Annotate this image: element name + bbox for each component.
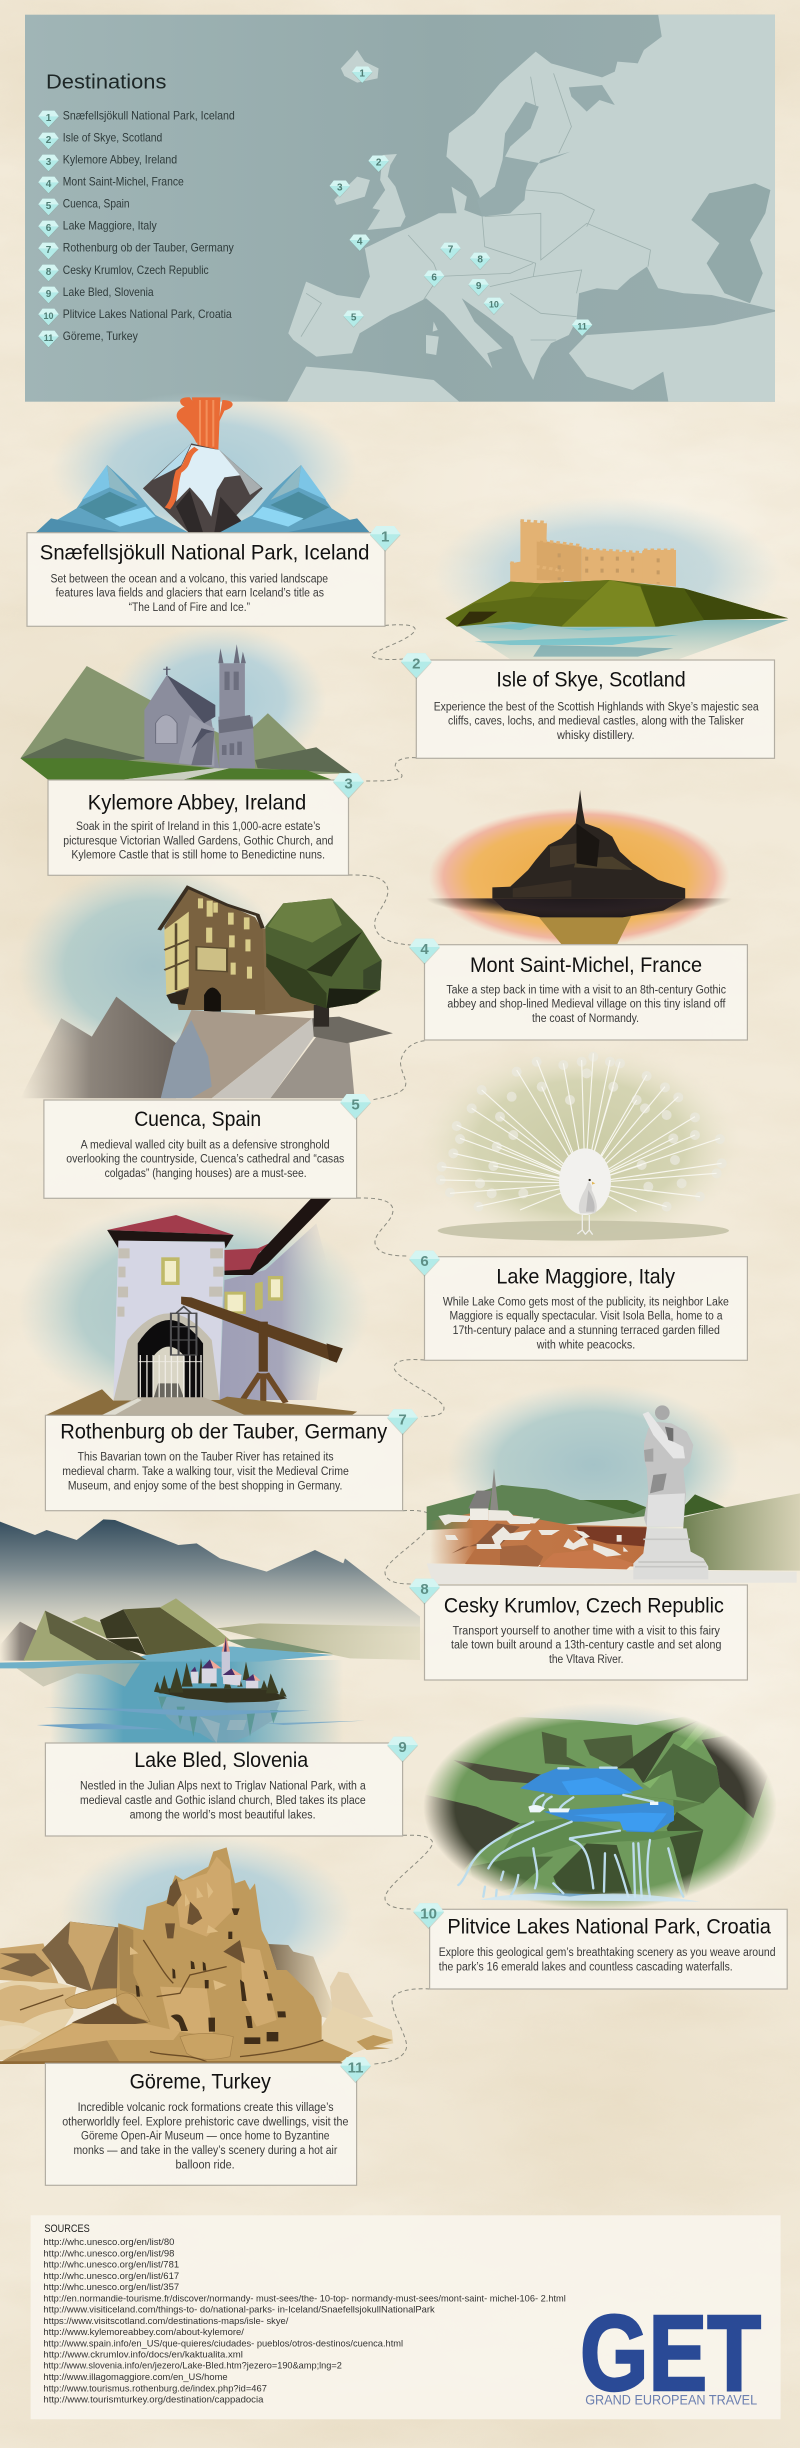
description: picturesque Victorian Walled Gardens, Gothic Church, and (63, 835, 333, 847)
gem 10: 10 (420, 1906, 437, 1923)
left glacier peak (36, 465, 189, 533)
gem 5 (340, 1094, 371, 1120)
gem 4 (409, 939, 440, 965)
description: the coast of Normandy. (532, 1013, 639, 1025)
destination list: 5 (46, 201, 52, 212)
gem 8 (409, 1579, 440, 1605)
sources list: http://whc.unesco.org/en/list/357 (43, 2282, 179, 2293)
title: Isle of Skye, Scotland (496, 669, 686, 692)
gem 4: 4 (420, 941, 429, 958)
sources list: http://www.kylemoreabbey.com/about-kylemore/ (43, 2327, 244, 2338)
description: Set between the ocean and a volcano, this varied landscape (50, 573, 328, 585)
description: tale town built around a 13th-century castle and set along (451, 1640, 721, 1652)
description: balloon ride. (176, 2159, 235, 2171)
gem 11 (340, 2057, 371, 2083)
destination list: 2 (46, 135, 52, 146)
sources list: http://whc.unesco.org/en/list/617 (43, 2271, 179, 2282)
description (446, 984, 726, 1025)
destination list: Lake Bled, Slovenia (63, 285, 154, 299)
description: otherworldly feel. Explore prehistoric cave dwellings, visit the (62, 2116, 348, 2128)
sources list: http://whc.unesco.org/en/list/80 (43, 2237, 174, 2248)
card 1: Snaefellsjokull (27, 526, 401, 626)
gem 3: 3 (344, 776, 353, 793)
title: Rothenburg ob der Tauber, Germany (60, 1421, 388, 1444)
description: features lava fields and glaciers that earn Iceland’s title as (56, 588, 324, 600)
card 8: Cesky Krumlov (409, 1579, 747, 1680)
title: Snæfellsjökull National Park, Iceland (40, 541, 369, 564)
illustration: Cuenca hanging houses (18, 865, 393, 1098)
destination list: 9 (46, 289, 52, 300)
card 10: Plitvice Lakes (413, 1903, 787, 1989)
description (80, 1781, 366, 1821)
description: cliffs, caves, lochs, and medieval castles, along with the Talisker (448, 716, 744, 728)
description: Take a step back in time with a visit to an 8th-century Gothic (446, 984, 726, 996)
destination list: 6 (46, 223, 52, 234)
map pins: 7 (448, 245, 454, 256)
description (66, 1139, 345, 1180)
destination list: Cesky Krumlov, Czech Republic (63, 263, 209, 277)
description: medieval charm. Take a walking tour, visit the Medieval Crime (62, 1466, 349, 1478)
description: among the world’s most beautiful lakes. (130, 1809, 316, 1821)
destination list: Snæfellsjökull National Park, Iceland (63, 108, 235, 122)
illustration: Icelandic volcano and glaciers (36, 392, 370, 548)
destination list: 1 (46, 113, 52, 124)
sources list: http://whc.unesco.org/en/list/98 (43, 2248, 174, 2259)
gem 5: 5 (351, 1096, 360, 1113)
map pins: 8 (477, 255, 483, 266)
gem 1 (370, 526, 401, 552)
sources list: http://www.illagomaggiore.com/en_US/home (43, 2372, 228, 2383)
sources list: http://www.visiticeland.com/things-to- do/national-parks- in-Iceland/SnaefellsjokullNationalPark (43, 2305, 435, 2316)
title: Lake Bled, Slovenia (134, 1749, 308, 1772)
logo: GET Grand European Travel: GET (580, 2292, 761, 2413)
map pins: 4 (357, 236, 363, 247)
title: Cuenca, Spain (134, 1108, 261, 1131)
title: Kylemore Abbey, Ireland (88, 791, 306, 814)
sources list: http://www.spain.info/en_US/que-quieres/ciudades- pueblos/otros-destinos/cuenca.html (43, 2338, 403, 2349)
map pins: 2 (376, 157, 382, 168)
destination list: 4 (46, 179, 52, 190)
description: Göreme Open-Air Museum — once home to Byzantine (81, 2131, 330, 2143)
description: Explore this geological gem’s breathtaking scenery as you weave around (439, 1947, 776, 1959)
card 11: Goreme (45, 2057, 371, 2185)
right glacier peak (219, 465, 370, 533)
gem 8: 8 (420, 1581, 429, 1598)
description: whisky distillery. (556, 730, 635, 742)
destination list: 7 (46, 245, 52, 256)
logo: GET Grand European Travel: GRAND EUROPEAN TRAVEL (585, 2391, 757, 2407)
map pins (330, 66, 592, 337)
sources list: http://whc.unesco.org/en/list/781 (43, 2260, 179, 2271)
description: Maggiore is equally spectacular. Visit Isola Bella, home to a (450, 1311, 723, 1323)
map land masses (287, 15, 775, 402)
destination list: Göreme, Turkey (63, 329, 138, 343)
description: While Lake Como gets most of the publicity, its neighbor Lake (443, 1296, 729, 1308)
dashed connectors (348, 625, 444, 2064)
description: with white peacocks. (536, 1339, 635, 1351)
card 2: Isle of Skye (401, 653, 774, 758)
gem 1: 1 (381, 528, 389, 545)
illustration: Cesky Krumlov and statue (427, 1383, 800, 1584)
description: Experience the best of the Scottish Highlands with Skye’s majestic sea (434, 701, 759, 713)
card 3: Kylemore Abbey (48, 773, 364, 875)
illustration: Goreme rock formations (0, 1835, 393, 2064)
sources list: http://www.slovenia.info/en/jezero/Lake-Bled.htm?jezero=190&amp;lng=2 (43, 2361, 342, 2372)
card 4: Mont Saint-Michel (409, 939, 747, 1040)
description: monks — and take in the valley’s scenery during a hot air (74, 2145, 337, 2157)
description: colgadas” (hanging houses) are a must-see. (105, 1168, 307, 1180)
description: abbey and shop-lined Medieval village on this tiny island off (447, 999, 726, 1011)
description: Transport yourself to another time with a visit to this fairy (453, 1625, 720, 1637)
sources list: http://en.normandie-tourisme.fr/discover/normandy- must-sees/the- 10-top- normandy-must-sees/mont-saint- michel-106- 2.html (43, 2293, 566, 2304)
title: Göreme, Turkey (130, 2071, 271, 2094)
sources list (43, 2237, 566, 2405)
description: 17th-century palace and a stunning terraced garden filled (453, 1325, 720, 1337)
gem 7 (387, 1409, 418, 1435)
description: medieval castle and Gothic island church, Bled takes its place (80, 1795, 366, 1807)
illustration: Mont Saint-Michel at sunset (426, 790, 732, 946)
destination list: Rothenburg ob der Tauber, Germany (63, 241, 234, 255)
map pins: 10 (489, 300, 499, 310)
destination list: Isle of Skye, Scotland (63, 130, 162, 144)
description: Soak in the spirit of Ireland in this 1,000-acre estate’s (76, 821, 321, 833)
gem 7: 7 (398, 1412, 407, 1429)
description: Incredible volcanic rock formations create this village’s (78, 2102, 334, 2114)
description (62, 1452, 349, 1492)
gem 6: 6 (420, 1253, 429, 1270)
description (50, 573, 328, 614)
description (439, 1947, 776, 1973)
gem 10 (413, 1903, 444, 1929)
description: Museum, and enjoy some of the best shopping in Germany. (68, 1480, 342, 1492)
card 7: Rothenburg (45, 1409, 418, 1511)
destination list: Cuenca, Spain (63, 197, 130, 211)
map pins: 1 (359, 68, 365, 79)
map panel: destinations (25, 15, 775, 402)
destination list: Mont Saint-Michel, France (63, 174, 184, 188)
destination list: 8 (46, 267, 52, 278)
destination list: 11 (44, 333, 53, 343)
description: Kylemore Castle that is still home to Benedictine nuns. (71, 850, 325, 862)
illustration: white peacock (418, 1045, 742, 1248)
gem 3 (333, 773, 364, 799)
description: the Vltava River. (549, 1654, 624, 1666)
destination list (38, 108, 235, 348)
description (63, 821, 333, 862)
sources heading: SOURCES (44, 2223, 90, 2235)
gem 2 (401, 653, 432, 679)
sources list: http://www.tourismus.rothenburg.de/index.php?id=467 (43, 2383, 267, 2394)
card 9: Lake Bled (45, 1737, 418, 1836)
description: overlooking the countryside, Cuenca’s cathedral and “casas (66, 1154, 345, 1166)
title: Lake Maggiore, Italy (496, 1265, 675, 1288)
gem 6 (409, 1251, 440, 1277)
description (443, 1296, 729, 1351)
illustration: Isle of Skye castle (434, 497, 788, 659)
illustration: Plitvice Lakes waterfalls (424, 1708, 774, 1908)
description: “The Land of Fire and Ice.” (129, 602, 250, 614)
title: Cesky Krumlov, Czech Republic (444, 1594, 724, 1617)
description (434, 701, 759, 742)
card 6: Lake Maggiore (409, 1251, 747, 1360)
destination list: Lake Maggiore, Italy (63, 219, 157, 233)
sources list: https://www.visitscotland.com/destinations-maps/isle- skye/ (43, 2316, 289, 2327)
map pins: 3 (337, 182, 343, 193)
illustration: Rothenburg tower and pillory (18, 1198, 370, 1418)
gem 2: 2 (412, 656, 420, 673)
gem 9 (387, 1737, 418, 1763)
map pins: 9 (476, 281, 482, 292)
description: Nestled in the Julian Alps next to Triglav National Park, with a (80, 1781, 366, 1793)
description: the park’s 16 emerald lakes and countless cascading waterfalls. (439, 1961, 733, 1973)
destination list: 3 (46, 157, 52, 168)
sources list: http://www.ckrumlov.info/docs/en/kaktualita.xml (43, 2350, 243, 2361)
description (451, 1625, 721, 1666)
panel: sources and logo (31, 2215, 781, 2419)
map pins: 5 (351, 312, 357, 323)
description: This Bavarian town on the Tauber River has retained its (78, 1452, 334, 1464)
illustration: Kylemore Abbey (20, 625, 352, 780)
map pins: 11 (577, 321, 587, 331)
description: A medieval walled city built as a defensive stronghold (81, 1139, 330, 1151)
map pins: 6 (431, 272, 437, 283)
title: Mont Saint-Michel, France (470, 954, 702, 977)
gem 11: 11 (348, 2060, 364, 2077)
map heading: Destinations (46, 72, 166, 94)
illustration: Lake Bled (0, 1519, 420, 1743)
description (62, 2102, 348, 2171)
destination list: Plitvice Lakes National Park, Croatia (63, 307, 232, 321)
gem 9: 9 (398, 1739, 407, 1756)
sources list: http://www.tourismturkey.org/destination/cappadocia (43, 2394, 264, 2405)
destination list: Kylemore Abbey, Ireland (63, 152, 177, 166)
card 5: Cuenca (44, 1094, 371, 1198)
destination list: 10 (43, 311, 54, 321)
title: Plitvice Lakes National Park, Croatia (447, 1915, 771, 1938)
